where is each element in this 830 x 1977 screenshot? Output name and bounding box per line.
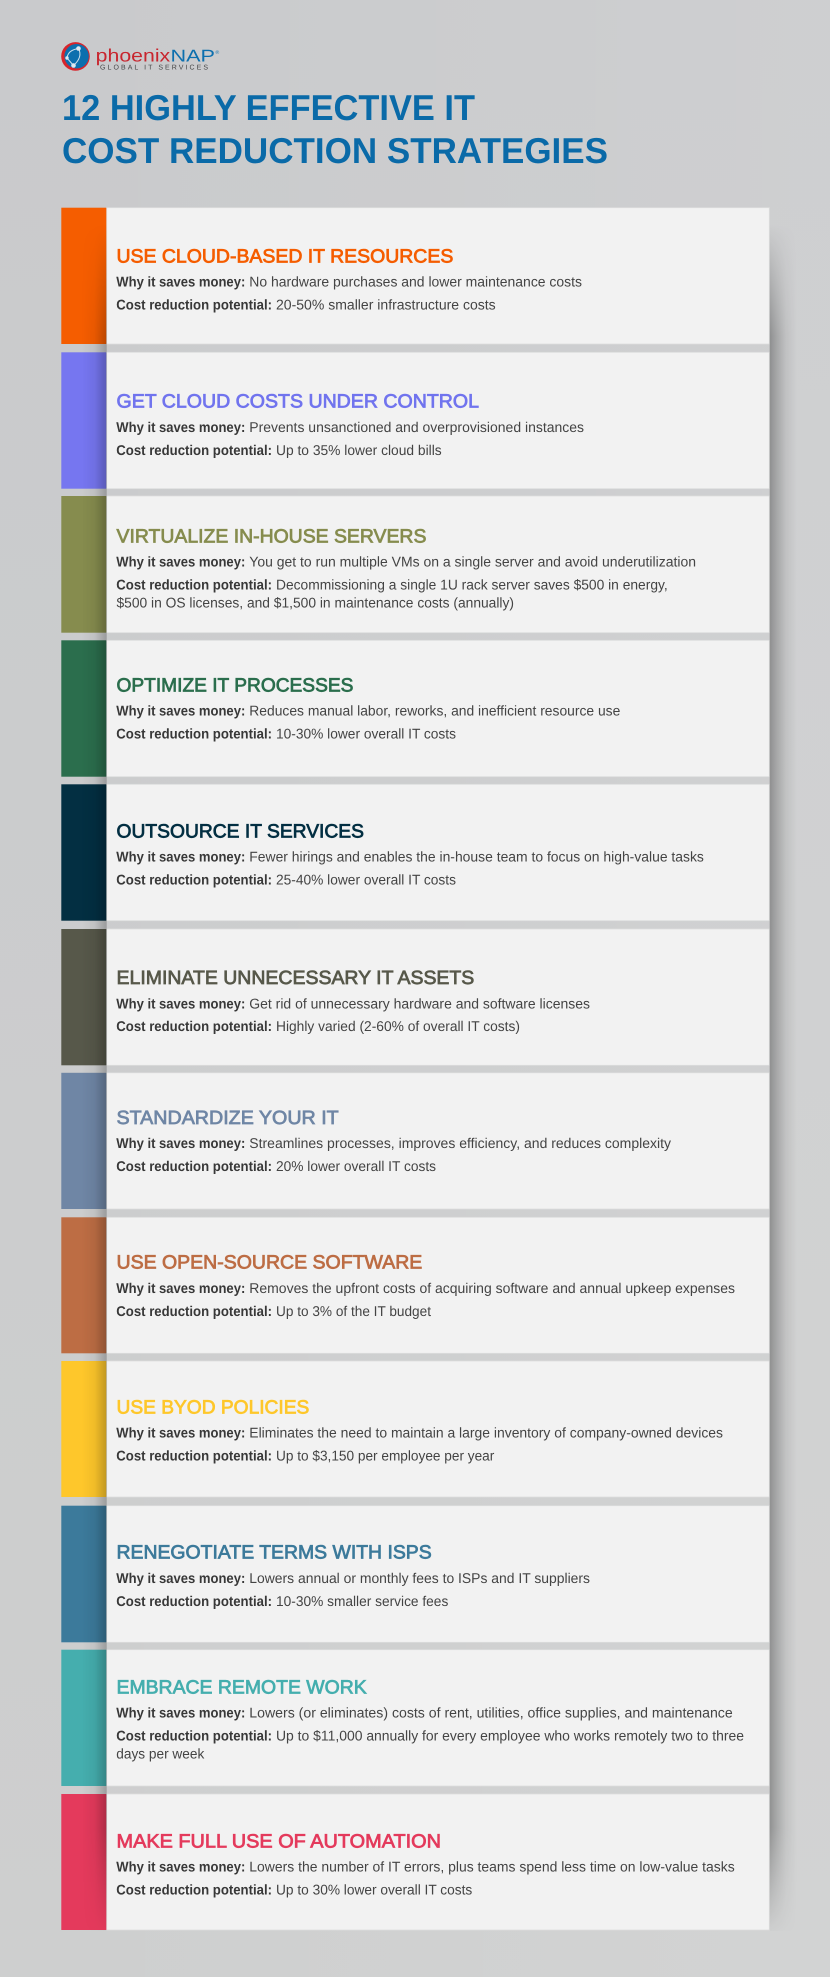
why it saves money: Lowers (or eliminates) costs of rent, utilities, office supplies, and maintenance — [249, 1706, 733, 1722]
heading: VIRTUALIZE IN-HOUSE SERVERS — [116, 527, 426, 548]
why it saves money: Why it saves money: — [116, 1426, 245, 1442]
cost reduction potential: Cost reduction potential: — [116, 443, 272, 459]
title — [62, 87, 608, 171]
cost reduction potential: Up to 3% of the IT budget — [276, 1304, 431, 1320]
panel: use cloud-based IT resources — [61, 208, 769, 344]
why it saves money: Why it saves money: — [116, 1281, 245, 1297]
why it saves money: Eliminates the need to maintain a large inventory of company-owned devices — [249, 1426, 723, 1442]
why it saves money: Why it saves money: — [116, 1571, 245, 1587]
panel: make full use of automation — [61, 1794, 769, 1930]
heading: MAKE FULL USE OF AUTOMATION — [116, 1831, 441, 1852]
color bar — [61, 496, 107, 633]
why it saves money: Why it saves money: — [116, 1136, 245, 1152]
logo: phoenixNAP — [61, 42, 220, 71]
card — [107, 640, 769, 777]
panel: virtualize in-house servers — [61, 496, 769, 633]
color bar — [61, 640, 107, 777]
panel: standardize your IT — [61, 1073, 769, 1209]
cost reduction potential: Cost reduction potential: — [116, 1449, 272, 1465]
color bar — [61, 352, 107, 489]
panel: embrace remote work — [61, 1650, 769, 1786]
cost reduction potential: Cost reduction potential: — [116, 1729, 272, 1745]
why it saves money: Why it saves money: — [116, 703, 245, 719]
logo wordmark: phoenix — [96, 46, 170, 66]
why it saves money: Why it saves money: — [116, 420, 245, 436]
why it saves money: Get rid of unnecessary hardware and software licenses — [249, 996, 590, 1012]
why it saves money: No hardware purchases and lower maintenance costs — [249, 275, 582, 291]
heading: OUTSOURCE IT SERVICES — [116, 821, 364, 842]
panel: eliminate unnecessary IT assets — [61, 929, 769, 1065]
heading: USE BYOD POLICIES — [116, 1397, 309, 1418]
card — [107, 496, 769, 633]
card — [107, 208, 769, 344]
why it saves money: You get to run multiple VMs on a single server and avoid underutilization — [249, 555, 696, 571]
cost reduction potential: Cost reduction potential: — [116, 298, 272, 314]
heading: USE CLOUD-BASED IT RESOURCES — [116, 246, 453, 267]
cost reduction potential: Cost reduction potential: — [116, 578, 272, 594]
cost reduction potential: Cost reduction potential: — [116, 1304, 272, 1320]
panel: outsource IT services — [61, 784, 769, 921]
panel: use BYOD policies — [61, 1361, 769, 1497]
color bar — [61, 1217, 107, 1353]
card — [107, 1506, 769, 1642]
why it saves money: Lowers annual or monthly fees to ISPs and IT suppliers — [249, 1571, 590, 1587]
why it saves money: Removes the upfront costs of acquiring software and annual upkeep expenses — [249, 1281, 735, 1297]
heading: EMBRACE REMOTE WORK — [116, 1677, 367, 1698]
color bar — [61, 929, 107, 1065]
cost reduction potential: $500 in OS licenses, and $1,500 in maintenance costs (annually) — [116, 595, 514, 611]
cost reduction potential: Up to 35% lower cloud bills — [276, 443, 442, 459]
cost reduction potential: Up to $3,150 per employee per year — [276, 1449, 495, 1465]
logo wordmark NAP: NAP — [170, 46, 215, 66]
panel: optimize IT processes — [61, 640, 769, 777]
heading: OPTIMIZE IT PROCESSES — [116, 675, 353, 696]
color bar — [61, 1794, 107, 1930]
why it saves money: Why it saves money: — [116, 1860, 245, 1876]
cost reduction potential: 20% lower overall IT costs — [276, 1159, 436, 1175]
cost reduction potential: Cost reduction potential: — [116, 1019, 272, 1035]
why it saves money: Why it saves money: — [116, 850, 245, 866]
panel: use open-source software — [61, 1217, 769, 1353]
logo tagline: GLOBAL IT SERVICES — [100, 64, 208, 71]
heading: GET CLOUD COSTS UNDER CONTROL — [116, 392, 479, 413]
card — [107, 352, 769, 489]
why it saves money: Lowers the number of IT errors, plus teams spend less time on low-value tasks — [249, 1860, 735, 1876]
cost reduction potential — [116, 1729, 744, 1762]
cost reduction potential — [116, 1883, 472, 1899]
icon: globe — [61, 42, 90, 71]
color bar — [61, 1506, 107, 1642]
cost reduction potential: Up to 30% lower overall IT costs — [276, 1883, 472, 1899]
card — [107, 1217, 769, 1353]
cost reduction potential: 10-30% lower overall IT costs — [276, 726, 456, 742]
cost reduction potential — [116, 873, 456, 889]
card — [107, 929, 769, 1065]
cost reduction potential — [116, 726, 456, 742]
color bar — [61, 1073, 107, 1209]
card — [107, 1650, 769, 1786]
why it saves money: Reduces manual labor, reworks, and inefficient resource use — [249, 703, 620, 719]
cost reduction potential — [116, 1019, 520, 1035]
title: COST REDUCTION STRATEGIES — [62, 130, 608, 171]
cost reduction potential: 25-40% lower overall IT costs — [276, 873, 456, 889]
cost reduction potential — [116, 1449, 495, 1465]
cost reduction potential: Cost reduction potential: — [116, 1159, 272, 1175]
cost reduction potential — [116, 443, 442, 459]
cost reduction potential — [116, 1594, 448, 1610]
why it saves money: Streamlines processes, improves efficiency, and reduces complexity — [249, 1136, 672, 1152]
why it saves money: Why it saves money: — [116, 1706, 245, 1722]
color bar — [61, 1361, 107, 1497]
card — [107, 1073, 769, 1209]
heading: STANDARDIZE YOUR IT — [116, 1108, 339, 1129]
card — [107, 1361, 769, 1497]
color bar — [61, 784, 107, 921]
cost reduction potential: days per week — [116, 1746, 205, 1762]
cost reduction potential: Decommissioning a single 1U rack server saves $500 in energy, — [276, 578, 668, 594]
heading: USE OPEN-SOURCE SOFTWARE — [116, 1253, 422, 1274]
cost reduction potential: Highly varied (2-60% of overall IT costs) — [276, 1019, 520, 1035]
heading: RENEGOTIATE TERMS WITH ISPS — [116, 1543, 432, 1564]
heading: ELIMINATE UNNECESSARY IT ASSETS — [116, 968, 474, 989]
card — [107, 784, 769, 921]
registered mark: ® — [216, 50, 220, 56]
color bar — [61, 208, 107, 344]
cost reduction potential — [116, 298, 496, 314]
color bar — [61, 1650, 107, 1786]
cost reduction potential: Up to $11,000 annually for every employee who works remotely two to three — [276, 1729, 744, 1745]
cost reduction potential: 10-30% smaller service fees — [276, 1594, 448, 1610]
cost reduction potential: 20-50% smaller infrastructure costs — [276, 298, 496, 314]
cost reduction potential: Cost reduction potential: — [116, 726, 272, 742]
why it saves money: Why it saves money: — [116, 996, 245, 1012]
cost reduction potential — [116, 1159, 436, 1175]
panel: renegotiate terms with ISPs — [61, 1506, 769, 1642]
card — [107, 1794, 769, 1930]
cost reduction potential: Cost reduction potential: — [116, 1883, 272, 1899]
why it saves money: Why it saves money: — [116, 275, 245, 291]
cost reduction potential — [116, 1304, 431, 1320]
why it saves money: Fewer hirings and enables the in-house team to focus on high-value tasks — [249, 850, 704, 866]
cost reduction potential: Cost reduction potential: — [116, 873, 272, 889]
panel: get cloud costs under control — [61, 352, 769, 489]
cost reduction potential — [116, 578, 668, 611]
cost reduction potential: Cost reduction potential: — [116, 1594, 272, 1610]
why it saves money: Prevents unsanctioned and overprovisioned instances — [249, 420, 584, 436]
title: 12 HIGHLY EFFECTIVE IT — [62, 87, 475, 128]
why it saves money: Why it saves money: — [116, 555, 245, 571]
